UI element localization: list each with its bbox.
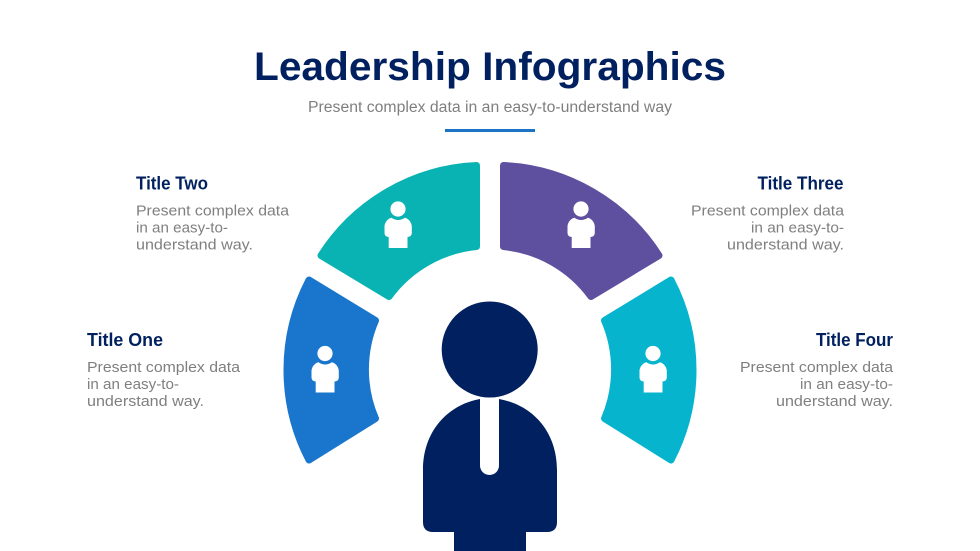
- text block: title two: Title Two: [136, 174, 208, 194]
- text block: title four: understand way.: [776, 393, 893, 410]
- icon: central leader figure: [423, 302, 557, 551]
- text block: title two: Present complex data: [136, 202, 290, 220]
- text block: title two: understand way.: [136, 236, 253, 254]
- title: Leadership Infographics: [254, 45, 726, 89]
- text block: title three: [691, 174, 845, 254]
- text block: title one: [87, 330, 241, 410]
- text block: title three: Present complex data: [691, 202, 845, 220]
- text block: title four: Title Four: [816, 330, 893, 350]
- text block: title four: in an easy-to-: [800, 376, 893, 393]
- text block: title four: [740, 330, 894, 410]
- text block: title one: in an easy-to-: [87, 376, 179, 393]
- text block: title three: understand way.: [727, 236, 844, 254]
- text block: title one: Present complex data: [87, 359, 241, 376]
- title underline accent: [445, 129, 535, 132]
- panel: segment four, cyan: [604, 280, 693, 460]
- icon: person three: [568, 201, 595, 248]
- icon: person two: [384, 201, 412, 248]
- panel: segment one, blue: [287, 280, 376, 460]
- panel: segment two, teal: [321, 166, 476, 296]
- text block: title three: in an easy-to-: [751, 220, 844, 236]
- text block: title two: in an easy-to-: [136, 220, 228, 236]
- icon: person four: [640, 346, 667, 392]
- text block: title two: [136, 174, 290, 254]
- text block: title one: understand way.: [87, 393, 204, 410]
- panel: segment three, purple: [504, 166, 659, 296]
- text block: title three: Title Three: [758, 174, 844, 194]
- text block: title four: Present complex data: [740, 359, 894, 376]
- text block: title one: Title One: [87, 330, 163, 350]
- icon: person one: [312, 346, 339, 392]
- subtitle: Present complex data in an easy-to-understand way: [308, 99, 672, 116]
